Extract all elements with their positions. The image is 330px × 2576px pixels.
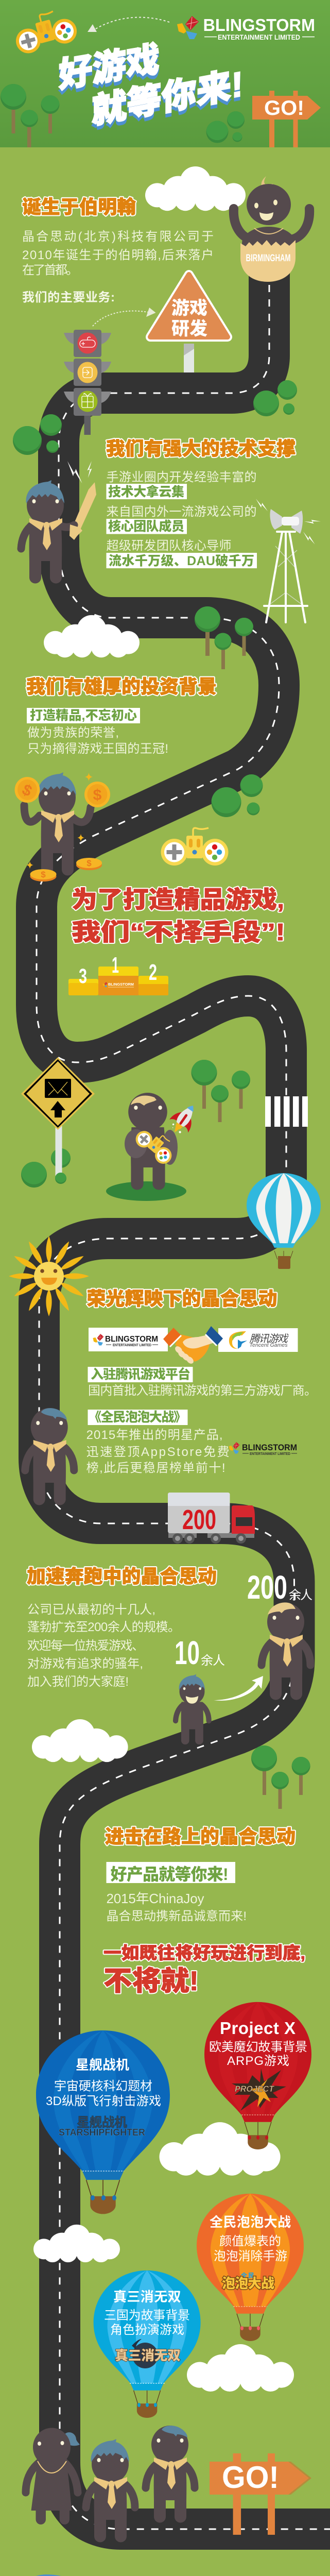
text: main business: 我们的主要业务: [22, 291, 115, 304]
balloon: Dynasty Match [94, 2270, 201, 2418]
cloud [187, 2344, 294, 2392]
heading: red slogan: 为了打造精品游戏, [72, 886, 284, 913]
balloon: Starship Fighter [36, 2030, 170, 2214]
balloon: Starship Fighter: 星舰战机 [76, 2057, 129, 2073]
number: 200: 200 [247, 1569, 287, 1606]
podium: BLINGSTORM [108, 983, 134, 987]
balloon: Bubble Battle: 泡泡消除手游 [214, 2249, 287, 2263]
text block: product: 榜,此后更稳居榜单前十! [86, 1461, 225, 1475]
panel: Birmingham intro [13, 166, 309, 455]
heading: accelerate: 加速奔跑中的晶合思动 [27, 1566, 217, 1587]
coins: $ [86, 858, 92, 868]
podium: 3 [79, 965, 87, 988]
title: 就等你来! [92, 67, 243, 135]
logo: small Blingstorm: BLINGSTORM [242, 1443, 297, 1452]
sign: game development: 游戏 [171, 298, 207, 318]
number: 10: 10 [175, 1634, 200, 1671]
coins: $ [93, 787, 102, 804]
text block: ChinaJoy: 好产品就等你来! [111, 1865, 229, 1884]
character: player with controller [106, 1093, 186, 1201]
balloon: Bubble Battle: 颜值爆表的 [219, 2234, 281, 2248]
text block: investment: 做为贵族的荣誉, [27, 726, 119, 740]
balloon: Dynasty Match: 角色扮演游戏 [110, 2323, 184, 2337]
panel: Tencent partnership [25, 1288, 317, 1505]
coins: $ [20, 781, 34, 800]
text block: product: 《全民泡泡大战》 [89, 1410, 186, 1425]
logo: Starship Fighter: STARSHIPFIGHTER [59, 2127, 145, 2138]
trees [1, 84, 60, 147]
logo: Project X [232, 2069, 286, 2111]
coins: $ [41, 870, 46, 879]
character: money man [14, 772, 110, 882]
sign: GO [210, 2453, 311, 2535]
heading: glory: 荣光辉映下的晶合思动 [86, 1288, 277, 1309]
sign: GO: GO! [222, 2460, 279, 2495]
heading: red slogan [103, 1943, 305, 1996]
road [37, 270, 330, 2529]
bushes [211, 774, 263, 817]
text block: product [86, 1410, 230, 1475]
trees [251, 1745, 310, 1809]
logo: Bubble Battle: 泡泡大战 [222, 2276, 274, 2291]
character: blue hair man [25, 1408, 74, 1505]
heading: red slogan: 我们“不择手段”! [72, 919, 285, 945]
icon: rocket [165, 1099, 202, 1139]
heading: tech: 我们有强大的技术支撑 [106, 438, 296, 459]
text block: tech list [106, 470, 257, 568]
cloud [33, 2225, 120, 2262]
logo card: Tencent Games: Tencent Games [249, 1342, 288, 1348]
logo: Project X: PROJECT [235, 2084, 275, 2094]
truck 200 [168, 1493, 255, 1544]
heading: red slogan: 不将就! [103, 1966, 199, 1996]
number: 10: 余人 [201, 1654, 225, 1668]
heading: investment: 我们有雄厚的投资背景 [26, 676, 217, 697]
logo card: Blingstorm: BLINGSTORM [105, 1335, 158, 1344]
logo: Blingstorm: ENTERTAINMENT LIMITED [218, 33, 300, 41]
podium [68, 953, 168, 995]
number: 200: 余人 [289, 1588, 312, 1602]
title: 好游戏 [59, 39, 160, 95]
heading: glory: 荣光辉映下的晶合思动 [86, 1288, 277, 1309]
logo: Starship Fighter [59, 2115, 145, 2138]
text block: investment: 打造精品,不忘初心 [30, 708, 137, 723]
panel: on the road [103, 1826, 305, 1996]
icon: lightning [63, 461, 92, 484]
text block: company intro: 在了首都。 [22, 263, 78, 277]
icon: smiling sun [9, 1236, 89, 1316]
trees [192, 1060, 250, 1122]
title: 就等你来! [92, 64, 243, 131]
text block: product: 2015年推出的明星产品, [86, 1428, 223, 1442]
text block: tech list: 手游业圈内开发经验丰富的 [106, 470, 256, 484]
podium: 1 [112, 953, 119, 978]
character: woman [26, 2428, 80, 2524]
podium: 2 [149, 960, 157, 985]
icon: game controller [11, 7, 79, 56]
heading: accelerate: 加速奔跑中的晶合思动 [27, 1566, 217, 1587]
balloon: Dynasty Match: 真三消无双 [113, 2289, 181, 2304]
logo: small Blingstorm [229, 1442, 297, 1456]
heading: red slogan [72, 886, 285, 945]
balloon: Starship Fighter: 3D纵版飞行射击游戏 [46, 2094, 161, 2108]
logo: Dynasty Match [115, 2339, 181, 2368]
heading: red slogan: 我们“不择手段”! [72, 919, 285, 945]
character: baby in egg [234, 176, 309, 260]
heading: advance: 进击在路上的晶合思动 [105, 1826, 296, 1847]
trees [195, 606, 253, 669]
balloon: Project X: ARPG游戏 [227, 2054, 289, 2068]
arrow: dotted to sign [93, 308, 155, 326]
text block: growth [27, 1603, 180, 1689]
cloud [32, 1719, 128, 1762]
balloon: Bubble Battle: 全民泡泡大战 [210, 2214, 291, 2230]
text block: tech list: 核心团队成员 [108, 519, 184, 534]
egg: Birmingham: BIRMINGHAM [246, 253, 290, 264]
text block: growth: 公司已从最初的十几人, [27, 1603, 155, 1617]
text block: company intro: 晶合思动(北京)科技有限公司于 [22, 230, 214, 244]
text block: growth: 欢迎每一位热爱游戏、 [27, 1639, 144, 1653]
balloon: Starship Fighter: 宇宙硬核科幻题材 [54, 2079, 152, 2093]
team of characters [26, 2426, 195, 2542]
logo card: Blingstorm [89, 1328, 168, 1351]
icon: controller [161, 828, 229, 866]
heading: red slogan: 为了打造精品游戏, [72, 886, 284, 913]
egg: Birmingham [240, 240, 296, 282]
text block: investment: 只为摘得游戏王国的王冠! [27, 742, 168, 756]
character: sword man [21, 480, 96, 583]
logo card: Blingstorm: ENTERTAINMENT LIMITED [113, 1344, 151, 1347]
sign: game development [150, 275, 228, 372]
road sign: diamond [21, 1057, 95, 1188]
heading: red slogan: 不将就! [103, 1966, 199, 1996]
text block: company intro: 2010年诞生于的伯明翰,后来落户 [22, 248, 214, 262]
logo card: Tencent Games [218, 1328, 298, 1352]
panel: technical support [21, 438, 321, 669]
character: small man [176, 1674, 209, 1744]
text block: platform: 入驻腾讯游戏平台 [91, 1367, 190, 1382]
text block: investment [27, 708, 168, 756]
logo: small Blingstorm: ENTERTAINMENT LIMITED [250, 1452, 290, 1456]
character: man with swept hair [146, 2426, 195, 2522]
truck 200: 200 [182, 1504, 216, 1535]
balloon: Project X: Project X [220, 2019, 296, 2038]
title: 好游戏 [59, 43, 160, 99]
heading: birth: 诞生于伯明翰 [22, 196, 136, 217]
text block: growth: 蓬勃扩充至200余人的规模。 [27, 1620, 180, 1634]
coins [14, 777, 110, 882]
crosswalk [265, 1096, 308, 1127]
balloon: Project X [204, 2002, 311, 2149]
text block: ChinaJoy: 2015年ChinaJoy [106, 1891, 204, 1906]
balloon: Dynasty Match: 三国为故事背景 [104, 2309, 190, 2323]
cloud [44, 615, 140, 657]
logo: Starship Fighter: 星舰战机 [77, 2115, 127, 2130]
cloud [145, 166, 246, 211]
balloon: blue white [247, 1173, 321, 1269]
heading: advance: 进击在路上的晶合思动 [105, 1826, 296, 1847]
text block: tech list: 技术大拿云集 [108, 484, 184, 499]
panel: growth [27, 1566, 312, 1809]
heading: red slogan: 一如既往将好玩进行到底, [103, 1943, 305, 1962]
text block: ChinaJoy: 晶合思动携新品诚意而来! [106, 1909, 247, 1923]
heading: investment: 我们有雄厚的投资背景 [26, 676, 217, 697]
cloud [160, 2122, 281, 2176]
title [59, 39, 243, 135]
arrow: growth [214, 1676, 263, 1701]
text block: tech list: 流水千万级、DAU破千万 [109, 553, 254, 568]
sign: GO: GO! [264, 97, 304, 120]
logo: Blingstorm: BLINGSTORM [203, 15, 315, 35]
icon: handshake [163, 1326, 223, 1365]
tower with loudspeaker [253, 498, 321, 622]
arrow: dashed to controller [88, 18, 169, 32]
text block: platform: 国内首批入驻腾讯游戏的第三方游戏厂商。 [88, 1384, 317, 1398]
heading: birth: 诞生于伯明翰 [22, 196, 136, 217]
traffic light [64, 330, 111, 435]
pond banner [10, 2574, 318, 2576]
balloon: Bubble Battle [197, 2194, 304, 2341]
text block: tech list: 超级研发团队核心导师 [106, 539, 232, 553]
balloon: Project X: 欧美魔幻故事背景 [209, 2040, 307, 2054]
logo: Blingstorm [177, 15, 315, 41]
text block: growth: 加入我们的大家庭! [27, 1675, 129, 1689]
character: man with spiky hair [86, 2439, 135, 2542]
header panel [0, 0, 330, 147]
bushes [13, 380, 297, 455]
logo: Dynasty Match: 真三消无双 [115, 2348, 181, 2363]
bushes by post [21, 1129, 71, 1188]
logo card: Tencent Games: 腾讯游戏 [249, 1333, 289, 1345]
text block: ChinaJoy [106, 1862, 247, 1923]
sign: GO [252, 91, 321, 147]
text block: tech list: 来自国内外一流游戏公司的 [106, 505, 256, 519]
sign: game development: 研发 [171, 319, 207, 339]
text block: platform [88, 1367, 317, 1398]
character: big man [262, 1602, 310, 1700]
text block: growth: 对游戏有追求的骚年, [27, 1657, 143, 1671]
bushes [206, 111, 245, 143]
panel: investment [14, 676, 285, 995]
text block: product: 迅速登顶AppStore免费 [86, 1445, 230, 1459]
text block: company intro [22, 230, 214, 277]
logo: Bubble Battle: 全民 [241, 2272, 254, 2279]
heading: tech: 我们有强大的技术支撑 [106, 438, 296, 459]
heading: red slogan: 一如既往将好玩进行到底, [103, 1943, 305, 1962]
